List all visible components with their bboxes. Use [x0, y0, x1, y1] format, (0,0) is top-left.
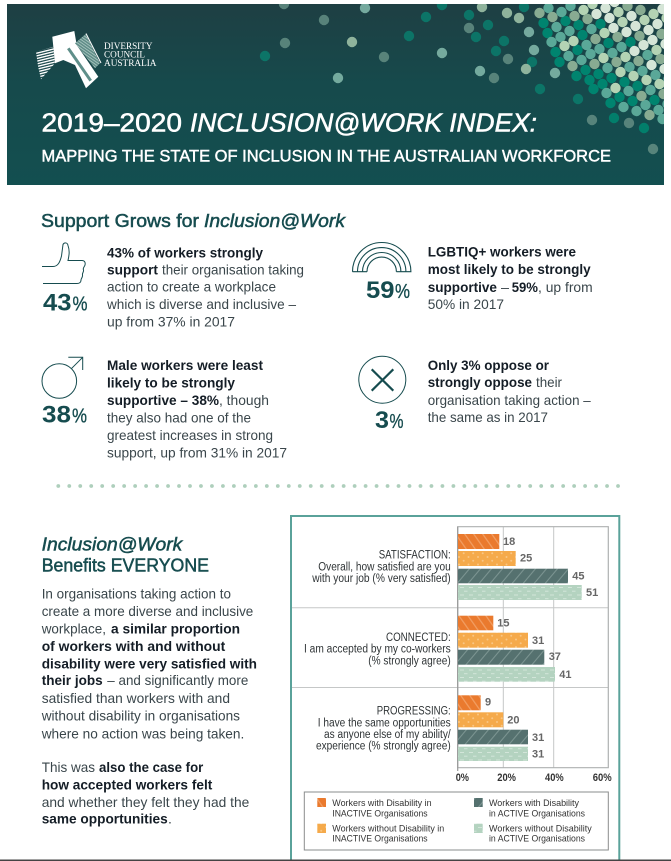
value: 3%: %	[390, 411, 404, 433]
title: INCLUSION@WORK INDEX:	[190, 108, 537, 138]
value: 59%	[366, 277, 410, 304]
header banner	[7, 2, 670, 185]
bars: connected: 41	[559, 669, 572, 681]
text: 38 percent: , though	[219, 392, 269, 408]
row label: progressing	[316, 705, 451, 753]
text: 38 percent: they also had one of the	[107, 409, 251, 425]
value: 43%: 43	[43, 290, 72, 316]
logo: Diversity Council Australia	[36, 31, 157, 88]
text: benefits paragraph one: create a more diverse and inclusive	[42, 603, 253, 619]
row: progressing	[316, 695, 544, 761]
legend item: with disability inactive	[317, 798, 432, 820]
row label: satisfaction: with your job (% very satisfied)	[311, 573, 451, 585]
text: 3 percent: their	[536, 374, 562, 390]
legend item: with disability active: in ACTIVE Organisations	[489, 809, 585, 820]
bars: progressing: 9	[485, 697, 491, 709]
legend item: with disability active: Workers with Disability	[489, 798, 579, 809]
bars: satisfaction	[458, 534, 598, 600]
text: 38 percent: support, up from 31% in 2017	[107, 444, 287, 460]
stat: 3 percent	[359, 356, 591, 434]
text: 43 percent	[106, 244, 304, 330]
text: 38 percent: Male workers were least	[107, 357, 263, 373]
value: 3%	[375, 407, 404, 434]
text: 3 percent: Only 3% oppose or	[428, 357, 550, 373]
heading: benefits everyone	[42, 534, 209, 576]
text: benefits paragraph one: satisfied than workers with and	[42, 690, 230, 706]
text: 59 percent	[428, 244, 593, 312]
text: benefits paragraph two: how accepted workers felt	[42, 776, 213, 792]
row label: progressing: experience (% strongly agree)	[316, 741, 451, 753]
value: 43%: %	[72, 294, 88, 316]
icon: thumbs up	[42, 243, 85, 284]
text: benefits paragraph one: where no action was being taken.	[41, 725, 244, 741]
row label: connected: (% strongly agree)	[368, 655, 451, 667]
row label: connected: I am accepted by my co-workers	[304, 644, 451, 656]
value: 59%: 59	[366, 277, 394, 304]
text: 3 percent: strongly oppose	[428, 374, 532, 390]
title	[42, 108, 537, 138]
legend item: without disability active	[474, 824, 592, 845]
stat: 43 percent	[42, 243, 304, 330]
text: benefits paragraph one: disability were very satisfied with	[42, 655, 257, 671]
bars: connected: 37	[549, 651, 561, 663]
heading: support grows: Support Grows for	[41, 210, 199, 231]
text: 43 percent: up from 37% in 2017	[107, 314, 235, 330]
bars: connected: 31	[532, 635, 544, 647]
heading: support grows	[41, 210, 347, 231]
text: 3 percent	[428, 357, 591, 425]
icon: rainbow	[352, 243, 411, 272]
row: satisfaction	[311, 534, 598, 600]
value: 59%: %	[395, 281, 410, 303]
row label: progressing: as anyone else of my ability/	[324, 729, 451, 741]
text: benefits paragraph two: and whether they felt they had the	[42, 794, 249, 810]
value: 38%: %	[72, 406, 87, 428]
bars: satisfaction: 18	[503, 536, 515, 548]
logo: Diversity Council Australia: AUSTRALIA	[104, 58, 157, 68]
value: 38%: 38	[42, 402, 71, 429]
text: benefits paragraph two: This was	[42, 759, 95, 775]
bars: progressing	[458, 695, 544, 761]
text: 38 percent: supportive – 38%	[107, 392, 220, 408]
section: support grows	[41, 210, 593, 460]
subtitle: MAPPING THE STATE OF INCLUSION IN THE AUSTRALIAN WORKFORCE	[42, 148, 611, 166]
text: 59 percent: –	[501, 279, 509, 295]
value: 38%	[42, 402, 87, 429]
text: 43 percent: which is diverse and inclusive –	[106, 296, 296, 312]
title: 2019–2020	[42, 108, 182, 138]
bars: progressing: 20	[507, 714, 520, 726]
legend item: without disability inactive: Workers without Disability in	[332, 824, 444, 835]
row label: satisfaction: Overall, how satisfied are you	[318, 562, 451, 574]
chart grid	[292, 527, 608, 771]
dot field decoration	[265, 2, 670, 149]
bars: satisfaction: 45	[572, 570, 585, 582]
text: 3 percent: organisation taking action –	[428, 392, 591, 408]
row label: connected	[304, 632, 451, 667]
text: 38 percent: greatest increases in strong	[107, 427, 273, 443]
x axis labels: 0%	[456, 772, 469, 784]
x axis labels	[456, 772, 612, 784]
icon: crossed circle	[359, 356, 406, 403]
x axis labels: 40%	[545, 772, 564, 784]
text: 59 percent: supportive	[428, 279, 497, 295]
bars: satisfaction: 51	[586, 587, 598, 599]
bars: progressing: 31	[532, 749, 544, 761]
text: 38 percent	[107, 357, 287, 460]
row label: satisfaction	[311, 549, 451, 585]
text: 59 percent: most likely to be strongly	[428, 261, 591, 277]
panel: bar chart	[291, 516, 619, 861]
text: 43 percent: their organisation taking	[162, 262, 304, 278]
x axis labels: 60%	[593, 772, 612, 784]
text: benefits paragraph one: In organisations taking action to	[42, 585, 231, 601]
text: 43 percent: 43% of workers strongly	[107, 244, 263, 260]
value: 43%	[43, 290, 88, 316]
logo: Diversity Council Australia: DIVERSITY	[104, 41, 153, 51]
row: connected	[304, 616, 572, 682]
row label: progressing: PROGRESSING:	[377, 705, 451, 717]
text: 43 percent: support	[107, 262, 158, 278]
bars: connected	[458, 616, 572, 682]
legend item: without disability active: in ACTIVE Organisations	[489, 834, 585, 845]
legend item: without disability active: Workers without Disability	[489, 824, 592, 835]
value: 3%: 3	[375, 407, 389, 434]
text: benefits paragraph two	[42, 759, 249, 827]
heading: benefits everyone: Inclusion@Work	[42, 534, 184, 555]
text: 38 percent: likely to be strongly	[107, 375, 235, 391]
bars: progressing: 31	[532, 732, 544, 744]
text: benefits paragraph one	[41, 585, 257, 741]
bars: satisfaction: 25	[520, 553, 532, 565]
legend	[304, 792, 608, 850]
text: 59 percent: LGBTIQ+ workers were	[428, 244, 576, 260]
x axis labels: 20%	[497, 772, 516, 784]
heading: benefits everyone: Benefits EVERYONE	[42, 555, 209, 576]
text: 3 percent: the same as in 2017	[428, 409, 548, 425]
text: benefits paragraph two: also the case for	[99, 759, 204, 775]
text: benefits paragraph two: .	[168, 811, 172, 827]
legend item: with disability active	[474, 798, 585, 820]
stat: 59 percent	[352, 243, 593, 312]
text: 59 percent: , up from	[538, 279, 593, 295]
text: 43 percent: action to create a workplace	[107, 279, 276, 295]
icon: male symbol	[42, 357, 83, 398]
text: benefits paragraph one: of workers with and without	[42, 638, 226, 654]
text: 59 percent: 50% in 2017	[428, 296, 504, 312]
text: benefits paragraph one: their jobs	[42, 672, 103, 688]
row label: connected: CONNECTED:	[386, 632, 451, 644]
legend item: without disability inactive	[317, 824, 444, 845]
heading: support grows: Inclusion@Work	[204, 210, 347, 231]
legend item: without disability inactive: INACTIVE Organisations	[332, 834, 428, 845]
stat: 38 percent	[42, 357, 287, 460]
text: benefits paragraph one: a similar proportion	[111, 620, 240, 636]
text: 59 percent: 59%	[512, 279, 539, 295]
bars: connected: 15	[497, 617, 510, 629]
text: benefits paragraph one: workplace,	[41, 620, 106, 636]
text: benefits paragraph one: without disability in organisations	[41, 707, 240, 723]
legend item: with disability inactive: Workers with Disability in	[332, 798, 432, 809]
legend item: with disability inactive: INACTIVE Organisations	[332, 809, 428, 820]
text: benefits paragraph one: – and significantly more	[107, 672, 249, 688]
text: benefits paragraph two: same opportunities	[42, 811, 168, 827]
section: benefits everyone	[41, 534, 257, 827]
logo: Diversity Council Australia: COUNCIL	[104, 50, 145, 60]
row label: progressing: I have the same opportunities	[318, 717, 451, 729]
row label: satisfaction: SATISFACTION:	[379, 549, 451, 561]
